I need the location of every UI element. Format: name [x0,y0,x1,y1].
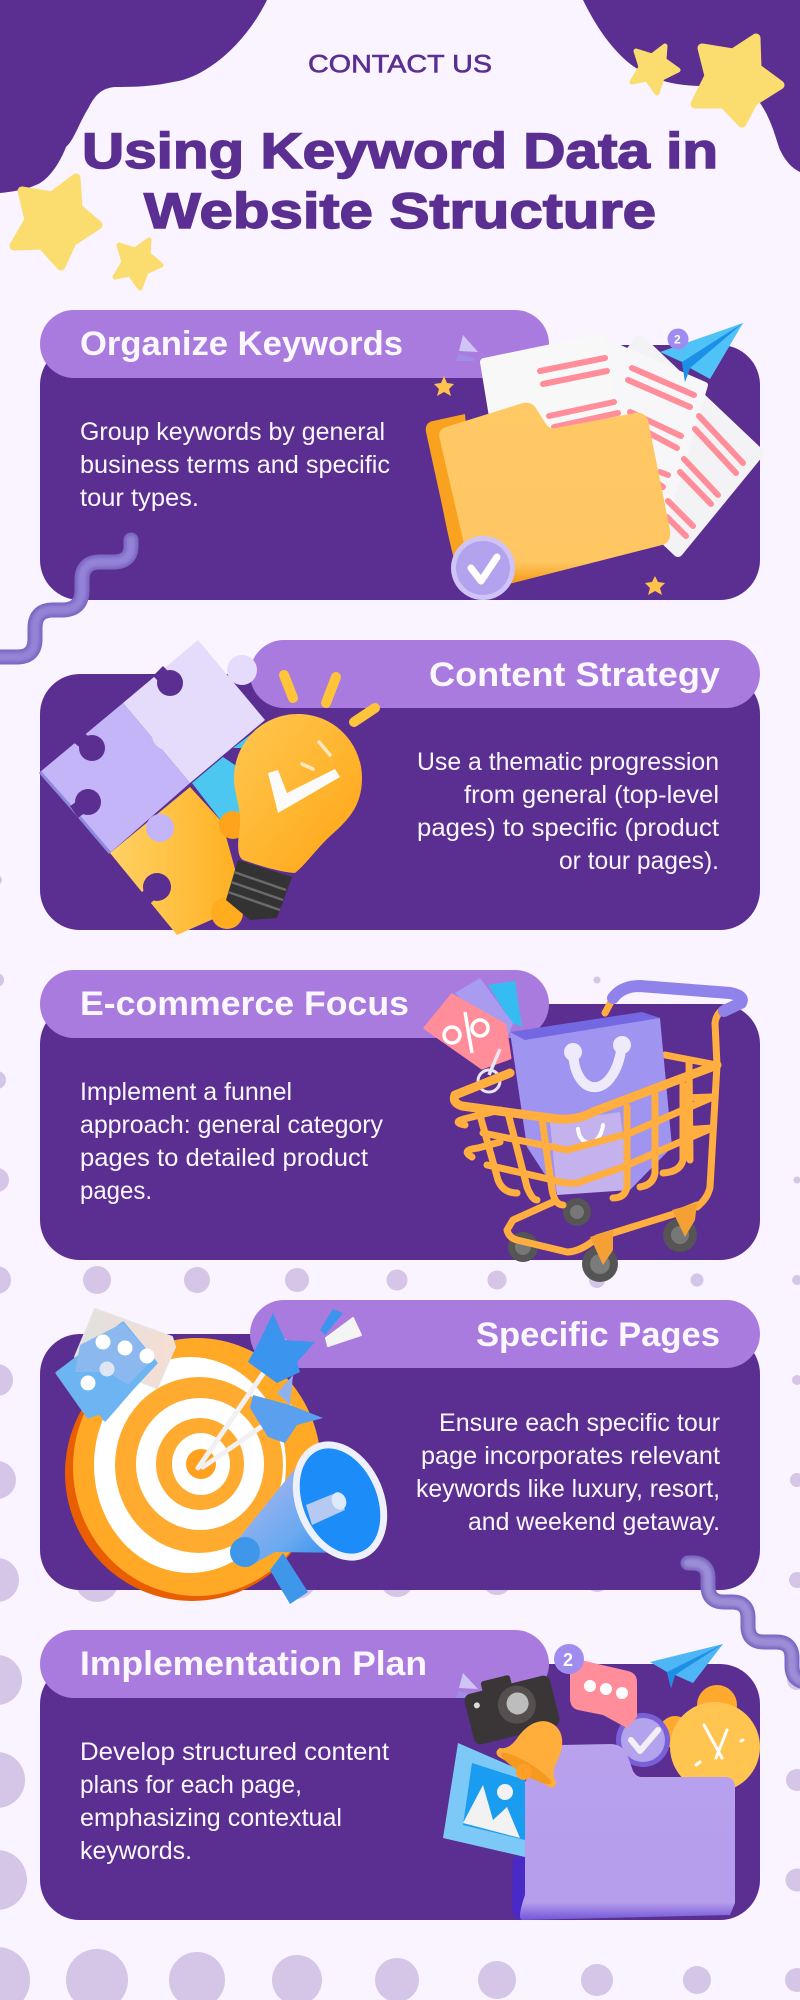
panel heading: organize keywords: Organize Keywords [80,325,403,363]
title [82,123,718,239]
icon: folder with documents: 2 [674,332,681,346]
panel heading: e-commerce focus: E-commerce Focus [80,985,409,1023]
panel text: organize keywords: business terms and specific [80,451,390,479]
panel text: specific pages: page incorporates relevant [421,1442,720,1470]
panel text: content strategy: from general (top-level [464,781,719,809]
eyebrow: contact us: CONTACT US [308,50,492,78]
decorative star, small left [115,240,161,288]
panel: organize keywords [40,310,760,600]
panel text: e-commerce focus: approach: general category [80,1111,383,1139]
panel text: organize keywords: Group keywords by general [80,418,385,446]
panel text: specific pages [416,1409,720,1536]
squiggle decoration, left [0,540,131,657]
panel text: implementation plan: keywords. [80,1837,192,1865]
decorative star, small right [632,46,678,93]
title: Using Keyword Data in [82,123,718,179]
panel text: implementation plan: emphasizing contextual [80,1804,342,1832]
panel text: implementation plan: Develop structured content [80,1738,389,1766]
icon: folder with camera, bell, clock: 2 [563,1650,573,1670]
panel heading: e-commerce focus [40,970,549,1038]
panel text: e-commerce focus: pages. [80,1177,152,1205]
panel heading: specific pages: Specific Pages [476,1316,720,1354]
panel text: e-commerce focus [80,1078,383,1205]
panel text: specific pages: keywords like luxury, resort, [416,1475,720,1503]
panel heading: organize keywords [40,310,549,378]
squiggle decoration, right [688,1563,800,1682]
panel text: specific pages: Ensure each specific tour [439,1409,720,1437]
decorative star, large left [14,178,98,266]
panel heading: implementation plan [40,1630,549,1698]
panel text: implementation plan: plans for each page, [80,1771,302,1799]
panel text: content strategy [417,748,719,875]
icon: folder with documents [426,323,759,600]
panel text: specific pages: and weekend getaway. [468,1508,720,1536]
decorative star, large right [695,38,780,123]
title: Website Structure [144,183,656,239]
panel text: content strategy: pages) to specific (product [417,814,719,842]
panel: e-commerce focus [40,970,760,1282]
panel heading: content strategy [250,640,760,708]
panel heading: content strategy: Content Strategy [429,656,720,694]
top left blob [0,0,267,193]
icon: target with darts and megaphone [57,1309,405,1604]
panel heading: specific pages [250,1300,760,1368]
background dot pattern [0,875,800,2000]
panel text: content strategy: or tour pages). [559,847,719,875]
panel text: e-commerce focus: pages to detailed product [80,1144,368,1172]
panel heading: implementation plan: Implementation Plan [80,1645,427,1683]
panel text: e-commerce focus: Implement a funnel [80,1078,292,1106]
icon: folder with camera, bell, clock [443,1644,760,1920]
panel text: content strategy: Use a thematic progression [417,748,719,776]
panel: implementation plan [40,1630,760,1920]
panel: content strategy [40,640,760,935]
panel text: organize keywords [80,418,390,512]
panel: specific pages [40,1300,760,1604]
panel text: organize keywords: tour types. [80,484,199,512]
icon: shopping cart [425,978,742,1282]
icon: puzzle and light bulb [40,640,375,935]
top right blob [583,0,800,172]
panel text: implementation plan [80,1738,389,1865]
